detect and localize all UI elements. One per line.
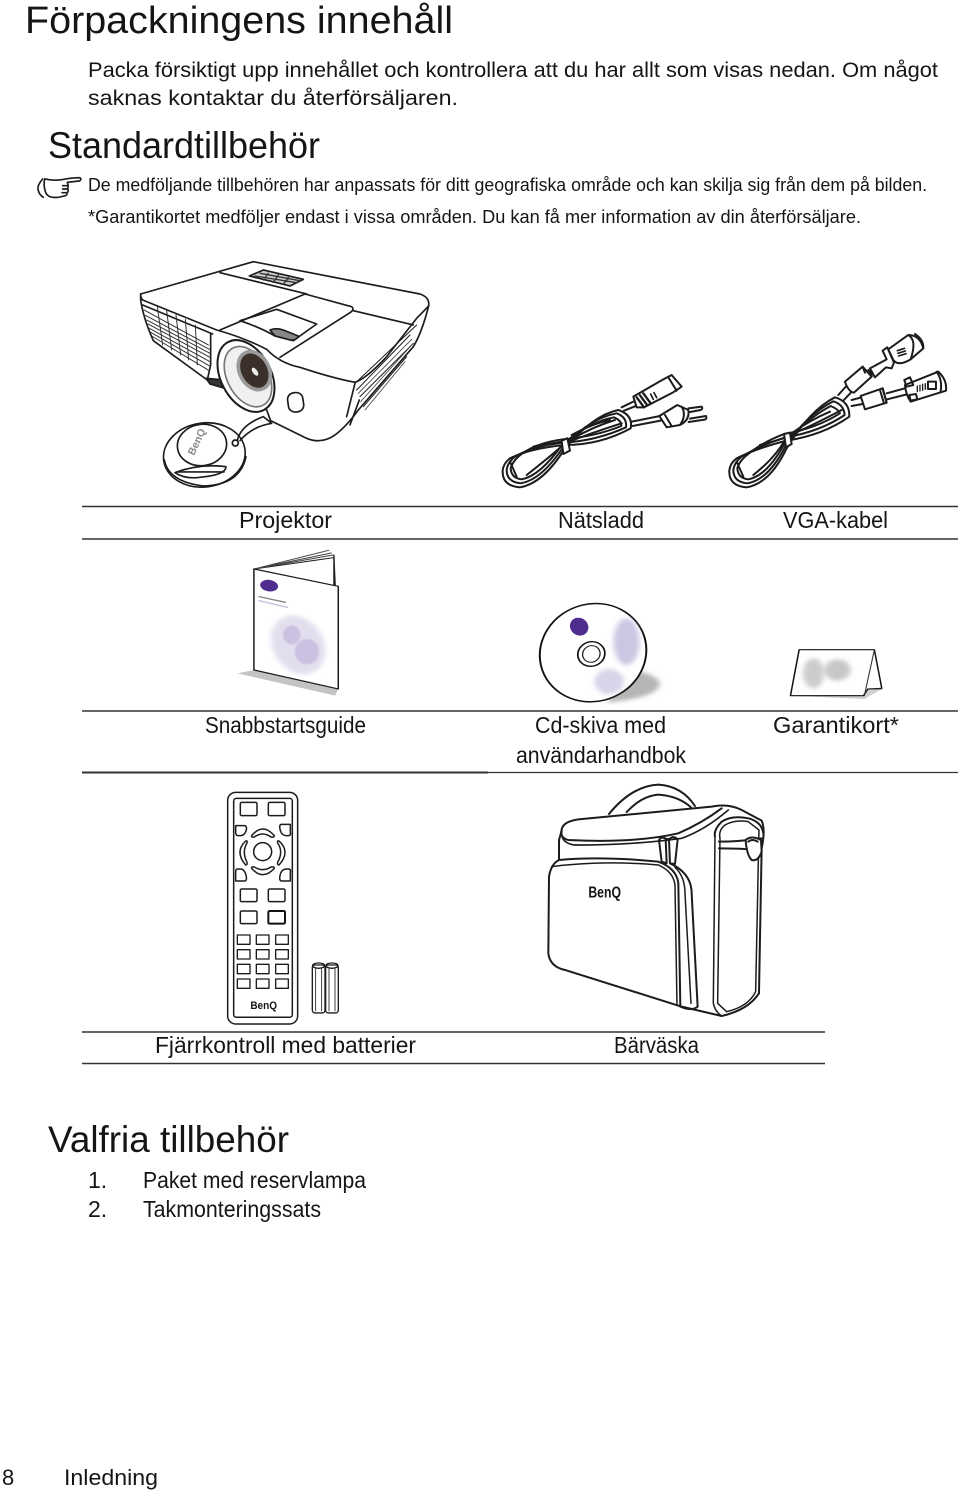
labels: row 1: VGA-kabel bbox=[783, 507, 888, 533]
icon: pointing hand bbox=[38, 178, 81, 197]
lens bbox=[206, 330, 286, 422]
labels: row 1: Projektor bbox=[239, 507, 332, 533]
wall plug bbox=[632, 416, 661, 426]
top hump bbox=[220, 294, 353, 357]
illustration: CD bbox=[532, 598, 660, 707]
table rules: row 1 bbox=[82, 506, 958, 539]
list: optional accessories bbox=[88, 1167, 366, 1222]
illustration: projector bbox=[141, 262, 429, 492]
footer bbox=[2, 1465, 158, 1490]
heading: standard accessories: Standardtillbehör bbox=[48, 125, 320, 166]
heading: optional accessories: Valfria tillbehör bbox=[48, 1119, 289, 1160]
note text: De medföljande tillbehören har anpassats för ditt geografiska område och kan skilja sig från dem på bilden. bbox=[88, 175, 927, 195]
lens cap bbox=[159, 418, 249, 492]
list: optional accessories: Takmonteringssats bbox=[143, 1196, 321, 1222]
labels: row 3: Bärväska bbox=[614, 1032, 699, 1058]
illustration: quick start guide bbox=[237, 550, 338, 696]
illustration: warranty card bbox=[790, 650, 883, 699]
illustration: carrying bag bbox=[548, 785, 764, 1016]
labels: row 2 bbox=[205, 712, 899, 768]
footer: 8 bbox=[2, 1465, 14, 1490]
intro text: Packa försiktigt upp innehållet och kontrollera att du har allt som visas nedan. Om något bbox=[88, 58, 938, 82]
batteries bbox=[312, 963, 338, 1013]
labels: row 2: användarhandbok bbox=[516, 742, 686, 768]
intro text bbox=[88, 58, 938, 110]
illustration: remote control and batteries bbox=[228, 792, 338, 1024]
list: optional accessories: Paket med reservlampa bbox=[143, 1167, 366, 1193]
list: optional accessories: 2. bbox=[88, 1196, 107, 1222]
labels: row 1 bbox=[239, 507, 888, 533]
labels: row 2: Garantikort* bbox=[773, 712, 899, 738]
illustration: VGA cable bbox=[729, 334, 946, 487]
illustration: power cable bbox=[503, 375, 706, 487]
labels: row 3: Fjärrkontroll med batterier bbox=[155, 1032, 416, 1058]
title: Förpackningens innehåll bbox=[25, 0, 453, 42]
appliance connector bbox=[622, 402, 636, 411]
list: optional accessories: 1. bbox=[88, 1167, 107, 1193]
illustration: remote control and batteries: BenQ bbox=[250, 1000, 277, 1012]
illustration: carrying bag: BenQ bbox=[588, 884, 621, 901]
labels: row 3 bbox=[155, 1032, 699, 1058]
labels: row 1: Nätsladd bbox=[558, 507, 644, 533]
note text: *Garantikortet medföljer endast i vissa områden. Du kan få mer information av din återförsäljare. bbox=[88, 207, 861, 227]
table rules: row 3 bbox=[82, 1032, 825, 1064]
sensor window bbox=[287, 392, 305, 413]
vents bbox=[144, 307, 210, 371]
table rules: row 2 bbox=[82, 711, 958, 772]
footer: Inledning bbox=[64, 1465, 158, 1490]
intro text: saknas kontaktar du återförsäljaren. bbox=[88, 86, 458, 110]
labels: row 2: Snabbstartsguide bbox=[205, 712, 366, 738]
labels: row 2: Cd-skiva med bbox=[535, 712, 666, 738]
illustration: projector: BenQ bbox=[186, 427, 209, 457]
lower connector bbox=[852, 397, 863, 406]
keypad bbox=[249, 270, 303, 286]
note text bbox=[88, 175, 927, 227]
upper connector bbox=[838, 385, 855, 400]
